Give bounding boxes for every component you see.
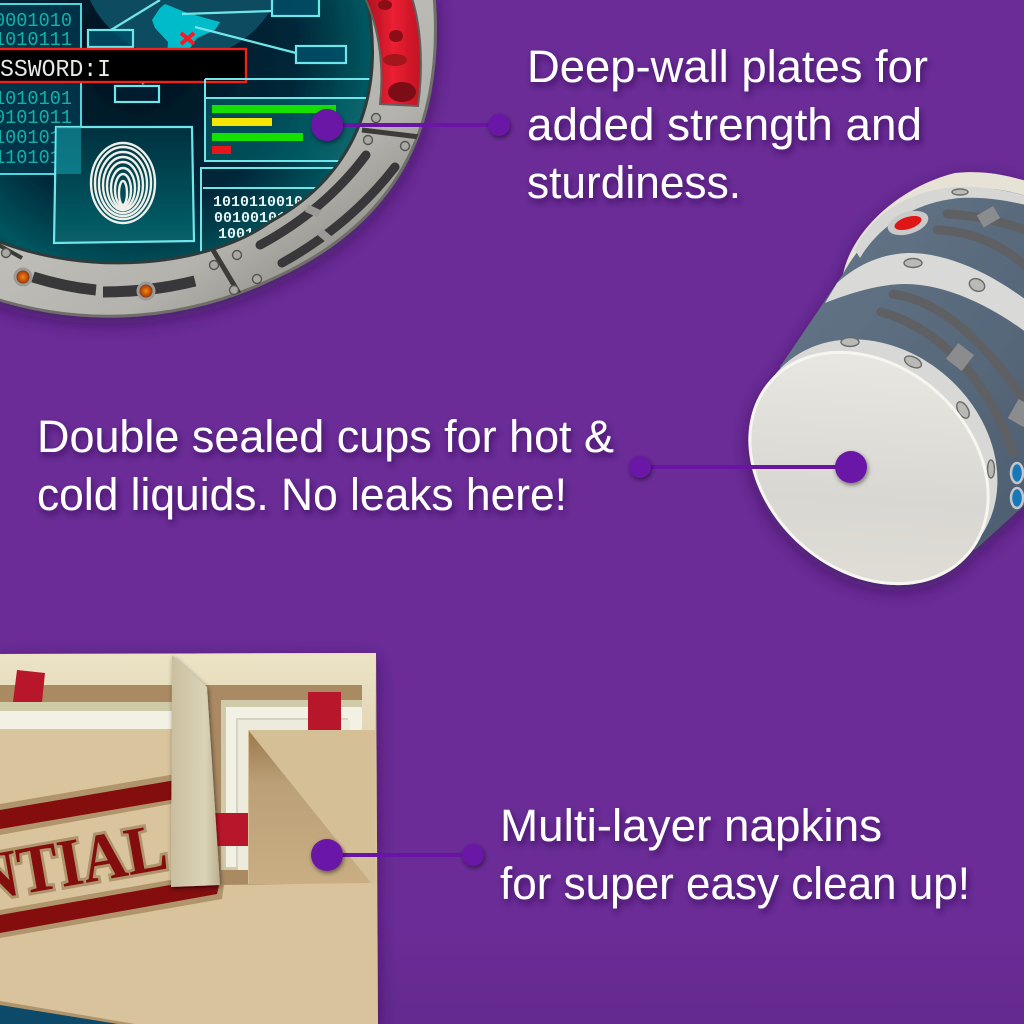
binary panel (0, 4, 81, 174)
napkin top cream band (0, 653, 376, 730)
cup red light (885, 206, 931, 240)
illustration: deep-wall plate (0, 0, 435, 316)
binary panel lower: 00100101 (214, 210, 286, 227)
cup top band (855, 187, 1024, 258)
stamp upper band (0, 774, 176, 835)
ring slots (33, 155, 395, 292)
center red tab (211, 813, 249, 846)
callout: plates (311, 109, 510, 141)
binary panel lower: 1010110010 (213, 194, 303, 211)
right flap (248, 730, 375, 884)
right folded layers (207, 690, 362, 885)
binary panel lower: 10011 (218, 226, 263, 243)
password box: SSWORD:I (0, 57, 111, 84)
caption: plates: sturdiness. (527, 157, 741, 208)
vertical fold strip (171, 655, 220, 887)
brown inner strip (0, 685, 362, 703)
red x marker (181, 33, 194, 44)
caption: plates: Deep-wall plates for (527, 41, 928, 92)
map land (152, 4, 220, 48)
cup slots (881, 214, 1024, 453)
fingerprint panel (54, 127, 194, 243)
end dot (462, 844, 484, 866)
connector line (327, 123, 499, 127)
cup sliders (946, 206, 1024, 427)
cup blue lights (1011, 463, 1023, 508)
caption: plates (527, 41, 928, 208)
right red tab (308, 692, 341, 730)
caption: plates: added strength and (527, 99, 922, 150)
cup base (703, 305, 1024, 631)
cup base band (706, 290, 1024, 626)
caption: napkins: Multi-layer napkins (500, 800, 882, 851)
screen rim shadow (0, 0, 372, 263)
anchor dot (835, 451, 867, 483)
globe (90, 0, 274, 48)
binary panel lower (201, 168, 340, 252)
lower paper (0, 883, 378, 1024)
cup rim (843, 172, 1024, 300)
amber lights (15, 269, 154, 299)
caption: cups: cold liquids. No leaks here! (37, 469, 567, 520)
stats panel (205, 79, 375, 161)
end dot (629, 456, 651, 478)
caption: napkins: for super easy clean up! (500, 858, 970, 909)
fingerprint (91, 143, 155, 223)
password box (0, 49, 246, 84)
ring screws (2, 114, 410, 294)
left paper layers (0, 702, 176, 729)
illustration: napkin package (0, 653, 378, 1024)
caption: napkins (500, 800, 970, 909)
plate metal ring (0, 0, 435, 316)
stamp lower band (0, 880, 224, 938)
stamped paper (0, 729, 176, 889)
ring joints (0, 130, 428, 300)
end dot (488, 114, 510, 136)
caption: cups: Double sealed cups for hot & (37, 411, 614, 462)
caption: cups (37, 411, 614, 520)
cup middle band (825, 253, 1024, 335)
illustration: paper cup (703, 172, 1024, 631)
cup screws (841, 189, 994, 478)
plate screen (0, 0, 375, 263)
blue stamp remnant (0, 1001, 135, 1024)
left red tab (13, 670, 45, 702)
ring sliders (305, 204, 333, 244)
callout: napkins (311, 839, 484, 871)
connector line (327, 853, 473, 857)
anchor dot (311, 109, 343, 141)
cup body (780, 188, 1024, 550)
callout: cups (629, 451, 867, 483)
red ring panel (365, 0, 421, 106)
napkin paper base (0, 653, 378, 1024)
network boxes (88, 0, 346, 102)
anchor dot (311, 839, 343, 871)
connector line (640, 465, 851, 469)
